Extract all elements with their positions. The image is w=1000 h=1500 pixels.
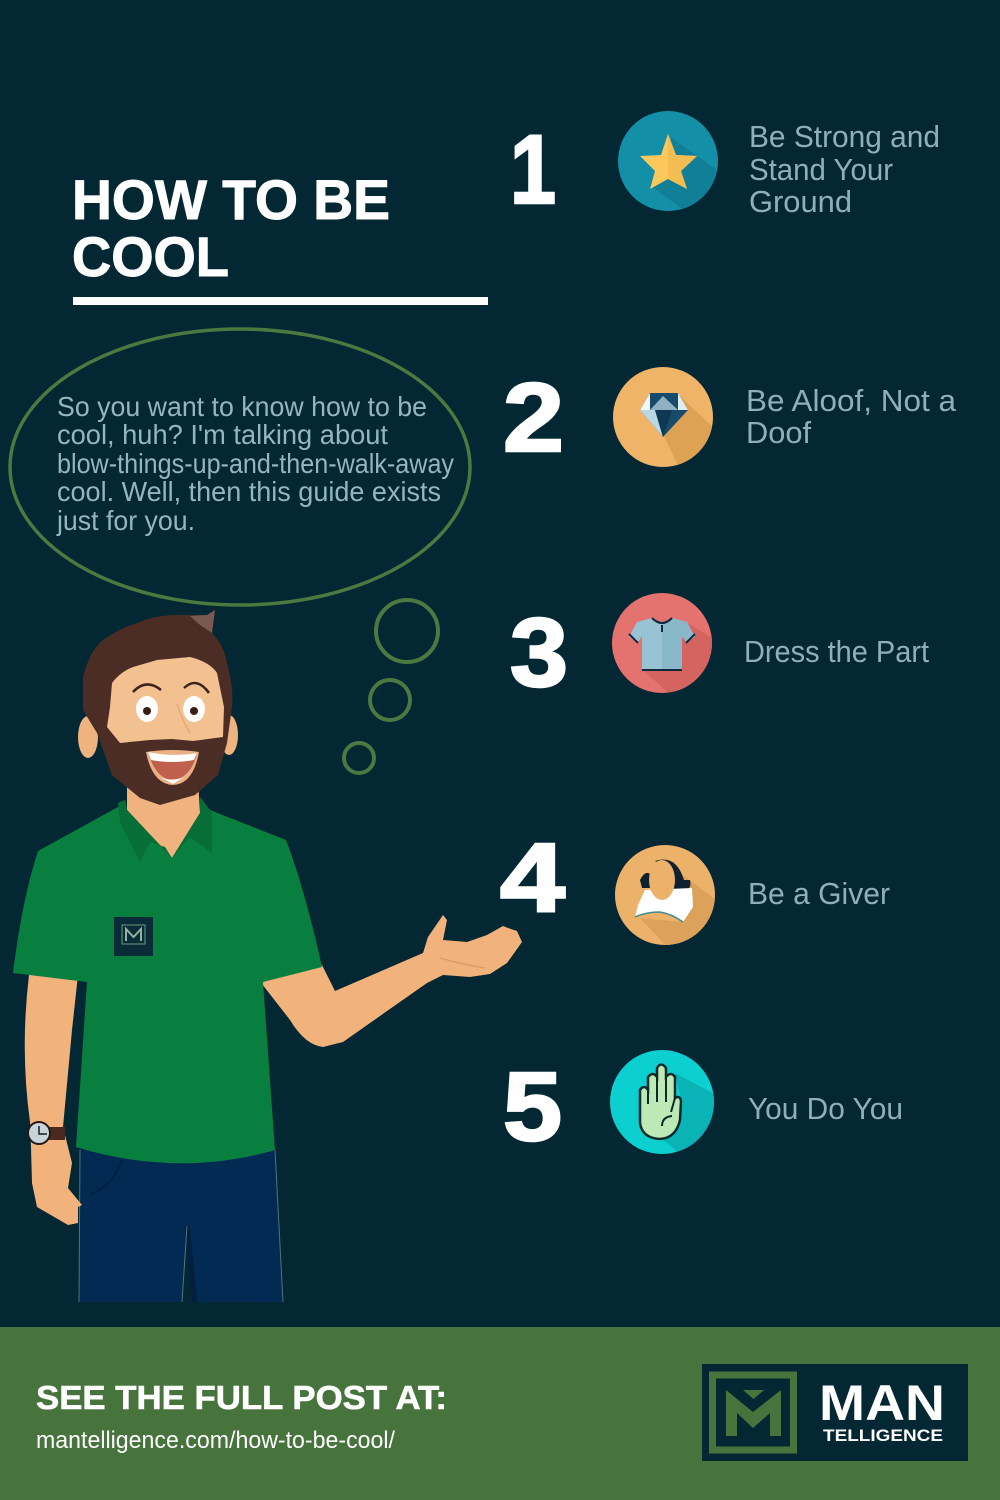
step 2 xyxy=(503,363,957,472)
mouth xyxy=(146,750,199,785)
hair and beard xyxy=(83,610,232,805)
step 5 xyxy=(503,1050,903,1161)
eyes xyxy=(133,683,209,733)
number 3: 3 xyxy=(510,598,568,707)
face xyxy=(107,657,224,743)
intro text: blow-things-up-and-then-walk-away xyxy=(57,448,454,479)
number 5: 5 xyxy=(503,1052,562,1161)
step 1 xyxy=(514,111,938,212)
label: Be Strong and xyxy=(749,119,940,154)
trousers xyxy=(79,1146,283,1302)
shirt xyxy=(13,797,322,1163)
label: Be a Giver xyxy=(748,876,890,911)
label xyxy=(746,383,957,450)
head xyxy=(78,610,238,805)
step 4 xyxy=(500,842,890,945)
logo xyxy=(702,1364,968,1461)
intro text: cool, huh? I'm talking about xyxy=(57,419,388,450)
thought bubble xyxy=(10,329,470,773)
intro text: cool. Well, then this guide exists xyxy=(57,476,441,507)
icon: raised hand xyxy=(610,1050,716,1155)
hair highlight xyxy=(190,610,215,633)
character xyxy=(13,610,522,1302)
right arm xyxy=(255,915,522,1047)
neck xyxy=(127,780,200,858)
thought circles xyxy=(344,600,438,773)
intro text: So you want to know how to be xyxy=(57,391,427,422)
footer url: mantelligence.com/how-to-be-cool/ xyxy=(36,1427,395,1454)
bubble outline xyxy=(10,329,470,605)
icon: star xyxy=(618,111,720,215)
step 3 xyxy=(510,593,929,693)
label: You Do You xyxy=(748,1091,903,1126)
label: Doof xyxy=(746,415,811,450)
footer band xyxy=(0,1327,1000,1500)
intro text: just for you. xyxy=(56,505,195,536)
icon: person with headset xyxy=(615,845,716,950)
label: Dress the Part xyxy=(744,634,929,669)
icon: shirt xyxy=(612,593,716,696)
label: Stand Your xyxy=(749,152,893,187)
title: COOL xyxy=(72,225,229,288)
number 4: 4 xyxy=(500,823,565,932)
number 1: 1 xyxy=(510,115,556,224)
icon: diamond xyxy=(613,367,716,470)
label: Be Aloof, Not a xyxy=(746,383,957,418)
left arm xyxy=(25,975,82,1225)
footer heading: SEE THE FULL POST AT: xyxy=(36,1379,447,1416)
logo: TELLIGENCE xyxy=(823,1426,943,1445)
logo: MAN xyxy=(819,1375,945,1431)
title: HOW TO BE xyxy=(72,168,390,231)
label xyxy=(749,119,940,219)
watch xyxy=(28,1122,65,1144)
shirt badge xyxy=(114,917,153,956)
title xyxy=(72,168,390,288)
label: Ground xyxy=(749,184,852,219)
intro text xyxy=(56,391,454,536)
ears xyxy=(78,716,98,758)
title underline xyxy=(73,297,488,305)
number 2: 2 xyxy=(503,363,564,472)
